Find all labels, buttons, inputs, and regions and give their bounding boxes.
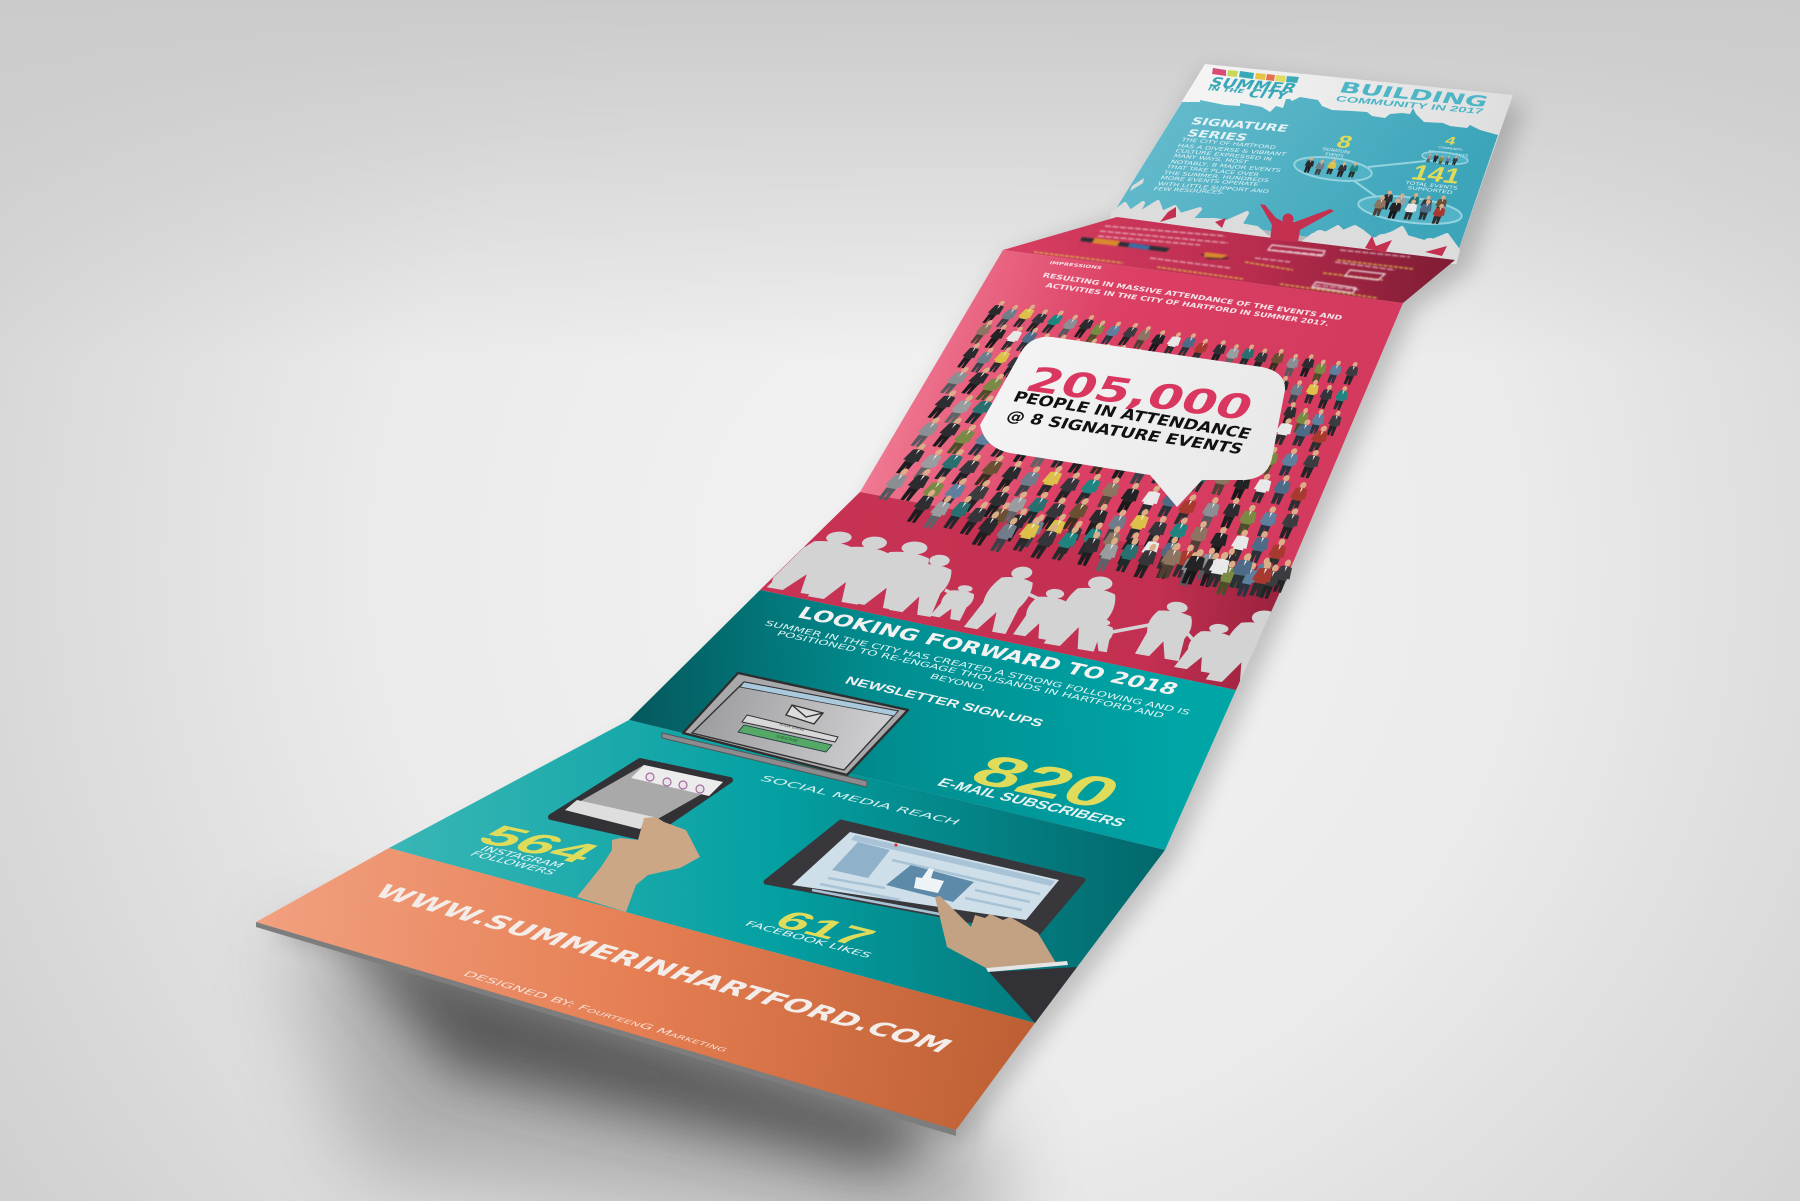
panel: signature series (1113, 64, 1513, 262)
stat: 4 pop-up events: POP-UP EVENTS (1428, 149, 1469, 158)
gold fold figures (1034, 252, 1413, 298)
stat caption: @ 8 SIGNATURE EVENTS (1003, 407, 1247, 458)
panel: looking forward (629, 528, 1291, 850)
icon: laptop: SUBSCRIBE (774, 735, 800, 743)
hand (577, 817, 700, 912)
designer credit: DESIGNED BY: FourteenG Marketing (459, 970, 732, 1054)
logo (1206, 68, 1300, 102)
paragraph: looking forward: POSITIONED TO RE-ENGAGE THOUSANDS IN HARTFORD AND (775, 629, 1167, 720)
paper edge (256, 922, 956, 1136)
icon: tablet with hand (766, 822, 1083, 1023)
stat: 564: INSTAGRAM (476, 845, 566, 870)
logo wordmark: IN THE (1206, 85, 1246, 95)
white fold text (1098, 226, 1410, 290)
paragraph: looking forward (763, 619, 1193, 720)
intro text: ACTIVITIES IN THE CITY OF HARTFORD IN SUMMER 2017. (1044, 281, 1331, 328)
panel: attendance (760, 250, 1403, 690)
paragraph: signature series: HAS A DIVERSE & VIBRANT (1176, 143, 1289, 158)
icon: laptop: YOUR EMAIL (777, 722, 808, 732)
stat: 141 total events: 141 (1408, 160, 1465, 189)
stat: 205,000: 205,000 (1019, 360, 1260, 428)
logo wordmark (1206, 75, 1300, 102)
panel: fold with reach figures (1003, 204, 1455, 303)
heading: signature series: SERIES (1184, 128, 1250, 144)
teal upper background (629, 590, 1236, 850)
stat: 564 (466, 820, 611, 877)
white fold frames (1268, 245, 1385, 293)
stat: 141 total events (1357, 160, 1465, 229)
fold background (1003, 217, 1455, 303)
logo colour blocks (1212, 68, 1299, 83)
stat: 564: 564 (466, 820, 611, 869)
stat: 141 total events: TOTAL EVENTS (1403, 180, 1459, 192)
hand (935, 896, 1056, 968)
multicolour image strip (1080, 237, 1230, 259)
intro text (1041, 271, 1345, 328)
family silhouettes (766, 532, 1272, 682)
speech bubble (980, 337, 1285, 507)
skyline blue field (1117, 97, 1498, 260)
paragraph: signature series (1152, 137, 1289, 196)
paragraph: signature series: WITH LITTLE SUPPORT AND (1156, 181, 1270, 195)
stat: 8 signature events (1293, 132, 1373, 185)
pink panel background (860, 250, 1403, 572)
website url: WWW.SUMMERINHARTFORD.COM (366, 881, 959, 1058)
subscribe button (738, 725, 832, 752)
crowd of people (874, 298, 1362, 604)
stat: 617: FACEBOOK LIKES (742, 919, 875, 959)
stat: 141 total events: SUPPORTED (1406, 185, 1454, 196)
icon: laptop (662, 673, 908, 787)
paragraph: signature series: MORE EVENTS OPERATE (1159, 175, 1260, 188)
envelope (786, 705, 823, 724)
intro text: RESULTING IN MASSIVE ATTENDANCE OF THE EVENTS AND (1041, 271, 1345, 322)
paragraph: signature series: THAT TAKE PLACE OVER (1163, 164, 1261, 178)
crimson lower background (760, 492, 1289, 690)
stat: 617 (742, 906, 884, 959)
stat: 820: 820 (957, 746, 1134, 818)
paragraph: signature series: THE CITY OF HARTFORD (1178, 137, 1277, 151)
stat: 617: 617 (764, 906, 884, 952)
stat: 4 pop-up events: COMMUNITY (1438, 145, 1463, 152)
suit sleeve (989, 967, 1077, 1023)
heading: building community: BUILDING (1336, 79, 1491, 111)
panel: social media reach (256, 673, 1165, 1136)
stat caption: PEOPLE IN ATTENDANCE (1010, 388, 1255, 443)
logo wordmark: CITY (1245, 87, 1292, 102)
paragraph: signature series: NOTABLY, 8 MAJOR EVENTS (1169, 159, 1282, 174)
paragraph: signature series: THE SUMMER. HUNDREDS (1160, 170, 1270, 184)
teal lower background (389, 720, 1165, 1023)
heading: signature series (1184, 116, 1291, 144)
orange footer background (256, 848, 1035, 1130)
heading: signature series: SIGNATURE (1188, 116, 1291, 135)
stat: 8 signature events: EVENTS (1325, 151, 1345, 159)
stat: 564: FOLLOWERS (466, 850, 559, 877)
icon: phone with hand (551, 761, 730, 912)
shirt cuff (986, 961, 1068, 972)
paragraph: signature series: CULTURE EXPRESSED IN (1174, 148, 1274, 163)
stat: 4 pop-up events: 4 (1443, 135, 1458, 148)
connector lines (1350, 161, 1426, 198)
impressions label: IMPRESSIONS (1048, 260, 1103, 271)
fold details (1034, 226, 1413, 298)
subheading: social media: SOCIAL MEDIA REACH (756, 775, 962, 827)
header paper (1117, 64, 1513, 260)
paragraph: looking forward: SUMMER IN THE CITY HAS CREATED A STRONG FOLLOWING AND IS (763, 619, 1193, 717)
cheering figure (1260, 204, 1334, 242)
email input (742, 715, 838, 742)
paragraph: signature series: MANY WAYS. MOST (1172, 153, 1251, 166)
stat: 820: E-MAIL SUBSCRIBERS (934, 775, 1130, 829)
paper shadow (270, 70, 1525, 1201)
small hand at edge (1130, 178, 1144, 191)
small crimson hands (1160, 207, 1447, 256)
paragraph: signature series: FEW RESOURCES. (1152, 186, 1227, 196)
laptop base (662, 733, 867, 787)
heading: building community (1334, 79, 1491, 116)
stat caption (1003, 388, 1255, 458)
thumb-up panel (886, 865, 974, 902)
crowd silhouette: grey cheering hands (1113, 202, 1458, 262)
stat: 8 signature events: 8 (1333, 132, 1356, 152)
heading: building community: COMMUNITY IN 2017 (1334, 94, 1486, 116)
heading: looking forward: LOOKING FORWARD TO 2018 (793, 604, 1183, 699)
stat: 820 (934, 746, 1134, 829)
paragraph: looking forward: BEYOND. (928, 672, 989, 693)
stat: 8 signature events: SIGNATURE (1322, 146, 1352, 155)
logo wordmark: SUMMER (1206, 75, 1300, 97)
subheading: newsletter: NEWSLETTER SIGN-UPS (842, 675, 1046, 730)
stat: 4 pop-up events (1422, 135, 1469, 167)
